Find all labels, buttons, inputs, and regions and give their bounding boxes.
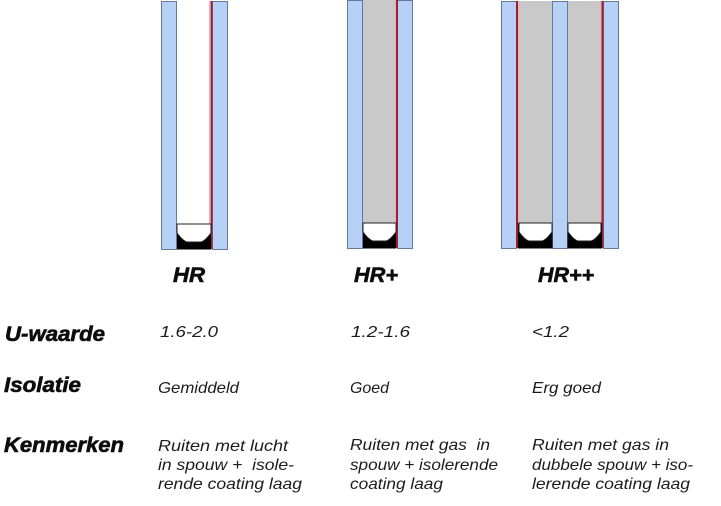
spacer left	[518, 223, 552, 248]
U-value HR+: 1.2-1.6	[351, 324, 410, 341]
coating layer	[210, 1, 212, 249]
spacer	[363, 223, 396, 248]
features HR++	[532, 437, 693, 493]
gas cavity	[362, 0, 397, 224]
gas cavity left	[518, 1, 552, 223]
features HR++: Ruiten met gas in	[532, 437, 669, 454]
diagram: HR glazing	[162, 1, 228, 250]
U-value HR: 1.6-2.0	[160, 324, 218, 341]
features HR+: coating laag	[350, 476, 443, 493]
coating layer	[395, 0, 397, 248]
features HR+	[350, 437, 498, 493]
left glass pane	[162, 2, 176, 250]
left glass pane	[502, 2, 516, 248]
features HR++: lerende coating laag	[532, 476, 690, 493]
features HR	[158, 438, 302, 493]
row label: Kenmerken: Kenmerken	[4, 434, 124, 457]
diagram: HR+ glazing	[348, 0, 412, 248]
insulation HR++: Erg goed	[532, 380, 602, 397]
features HR++: dubbele spouw + iso-	[532, 457, 693, 474]
heading: HR++: HR++	[538, 264, 594, 287]
features HR: Ruiten met lucht	[158, 438, 289, 455]
coating layer left	[517, 1, 519, 248]
row label: Isolatie: Isolatie	[4, 374, 81, 397]
features HR+: Ruiten met gas in	[350, 437, 490, 454]
gas cavity right	[568, 1, 602, 223]
heading: HR: HR	[173, 264, 206, 287]
U-value HR++: <1.2	[532, 324, 569, 341]
insulation HR+: Goed	[350, 380, 390, 397]
right glass pane	[398, 0, 412, 248]
features HR: in spouw + isole-	[158, 457, 294, 474]
row label: U-waarde: U-waarde	[5, 323, 105, 346]
left glass pane	[348, 0, 362, 248]
heading: HR+: HR+	[354, 264, 398, 287]
insulation HR: Gemiddeld	[158, 380, 240, 397]
spacer	[177, 224, 211, 250]
diagram: HR++ glazing	[502, 1, 618, 248]
coating layer right	[600, 1, 602, 248]
features HR: rende coating laag	[158, 476, 302, 493]
right glass pane	[604, 2, 618, 248]
spacer right	[568, 223, 602, 248]
right glass pane	[212, 2, 228, 250]
middle glass pane	[552, 2, 568, 248]
features HR+: spouw + isolerende	[350, 457, 498, 474]
